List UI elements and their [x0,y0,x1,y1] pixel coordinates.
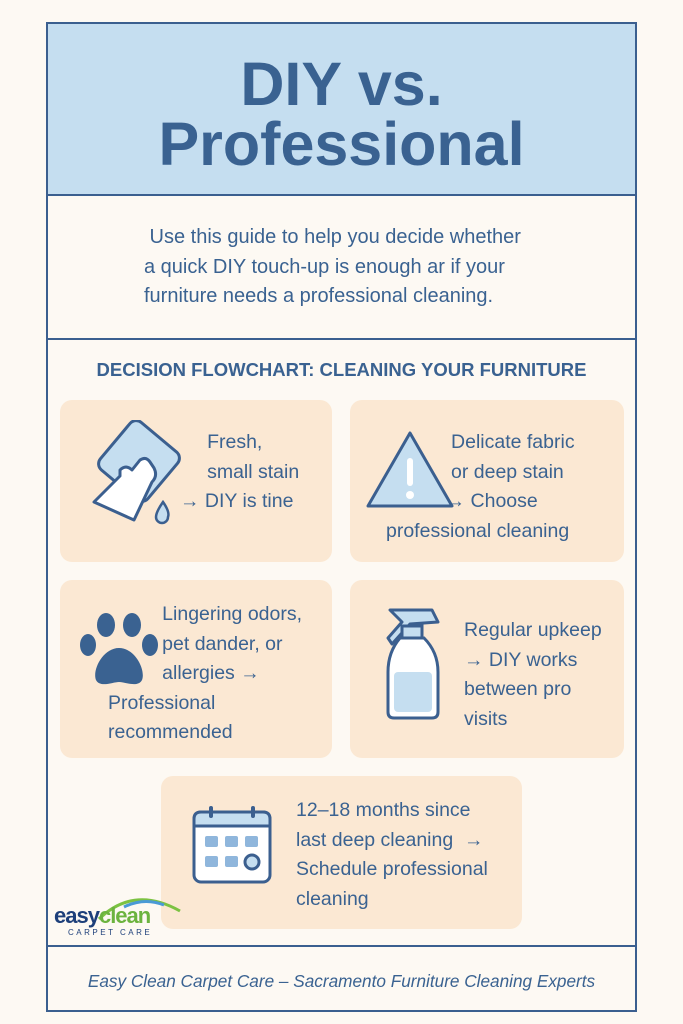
text [296,799,488,910]
text: last deep cleaning → [296,828,484,850]
footer: Easy Clean Carpet Care – Sacramento Furniture Cleaning Experts [88,971,595,991]
logo [54,898,181,937]
text: cleaning [296,888,369,910]
text [108,603,302,743]
text: or deep stain [451,460,564,482]
card: odors [60,580,332,758]
icon: calendar [192,806,272,884]
text: 12–18 months since [296,799,471,821]
icon: hand wiping [92,420,181,524]
text: → DIY is tine [180,490,293,512]
text: Regular upkeep [464,619,602,641]
section heading: DECISION FLOWCHART: CLEANING YOUR FURNITURE [97,359,586,380]
card: fresh stain [60,400,332,562]
card: regular upkeep [350,580,624,758]
text: recommended [108,721,233,743]
title band [46,22,637,196]
card: 12-18 months [161,776,522,929]
text [386,431,575,542]
text: Delicate fabric [451,431,575,453]
text: Professional [108,692,215,714]
text: between pro [464,678,571,700]
text [464,619,602,730]
text: Lingering odors, [162,603,302,625]
text: visits [464,708,507,730]
icon: paw [80,613,158,684]
text: → Choose [446,490,538,512]
icon: spray bottle [386,608,440,720]
text: professional cleaning [386,520,569,542]
intro text: furniture needs a professional cleaning. [144,285,493,307]
logo: CARPET CARE [68,928,152,937]
text [180,431,299,512]
intro text: Use this guide to help you decide whether [150,226,521,248]
text: allergies → [162,662,260,684]
title band: Professional [158,110,525,178]
title band: DIY vs. [240,50,443,118]
logo: easyclean [54,903,150,928]
intro text: a quick DIY touch-up is enough ar if your [144,256,505,278]
text: Fresh, [207,431,262,453]
text: pet dander, or [162,632,283,654]
icon: warning [366,431,454,508]
text: → DIY works [464,648,577,670]
text: Schedule professional [296,858,488,880]
card: delicate fabric [350,400,624,562]
footer [46,945,637,1012]
intro text [46,196,637,340]
text: small stain [207,460,299,482]
